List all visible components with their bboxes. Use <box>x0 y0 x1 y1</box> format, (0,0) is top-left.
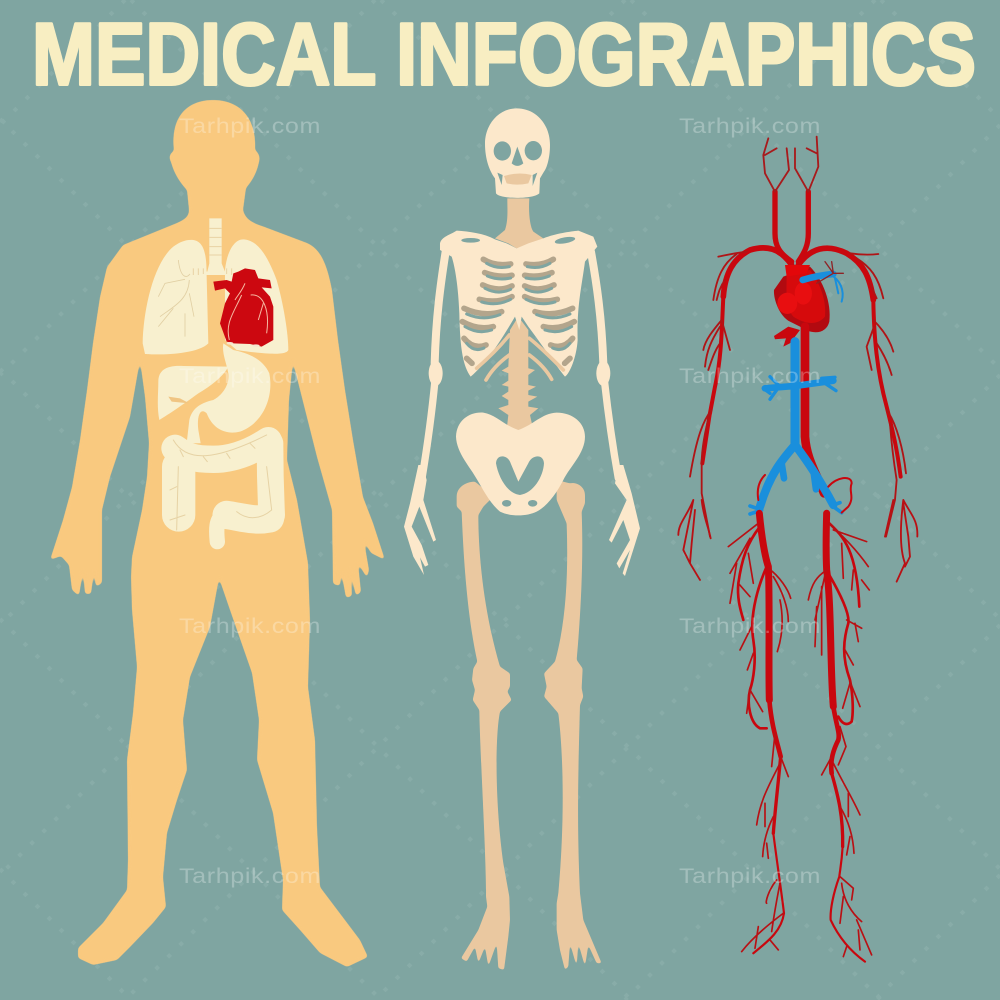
lower floating ribs <box>477 335 563 380</box>
right lung <box>225 239 288 354</box>
realistic heart <box>213 268 273 347</box>
elbows <box>429 361 610 386</box>
pelvic artery loop <box>828 478 852 513</box>
watermarks: Tarhpik.com <box>679 615 821 638</box>
panel: skeleton <box>404 108 640 970</box>
head and neck arteries <box>763 137 818 262</box>
bronchial tree <box>158 260 194 337</box>
skeleton hands <box>404 465 640 576</box>
rib gaps <box>462 259 574 363</box>
leg bones with knees and feet <box>457 480 602 970</box>
large intestine <box>170 435 272 542</box>
neck vertebrae and collar <box>495 198 543 248</box>
pelvic openings <box>496 456 544 507</box>
arm arteries <box>690 248 906 537</box>
panel: circulatory system <box>678 137 917 962</box>
watermarks: Tarhpik.com <box>179 115 321 138</box>
skull <box>485 108 550 198</box>
watermarks: Tarhpik.com <box>679 865 821 888</box>
watermarks: Tarhpik.com <box>679 365 821 388</box>
heart <box>774 265 830 347</box>
watermarks: Tarhpik.com <box>179 615 321 638</box>
right leg arteries <box>808 513 872 962</box>
blue veins <box>750 274 843 514</box>
left leg arteries <box>728 513 791 953</box>
aorta <box>805 327 824 493</box>
stomach <box>187 343 270 443</box>
liver <box>158 366 228 420</box>
watermarks: Tarhpik.com <box>179 865 321 888</box>
trachea and bronchi <box>190 218 237 275</box>
left lung <box>143 240 208 354</box>
panel: human body with organs <box>50 100 385 967</box>
watermarks: Tarhpik.com <box>179 365 321 388</box>
forearm and hand branches <box>678 500 917 582</box>
body silhouette <box>50 100 385 967</box>
gallbladder <box>168 397 189 403</box>
watermarks: Tarhpik.com <box>679 115 821 138</box>
pelvis <box>456 413 585 515</box>
small heart branches <box>817 262 843 283</box>
shoulder gaps <box>461 236 576 245</box>
upper arm and forearm bones <box>422 252 618 478</box>
shoulders and rib cage <box>440 231 597 377</box>
spine <box>498 317 538 430</box>
watermarks <box>179 115 821 888</box>
